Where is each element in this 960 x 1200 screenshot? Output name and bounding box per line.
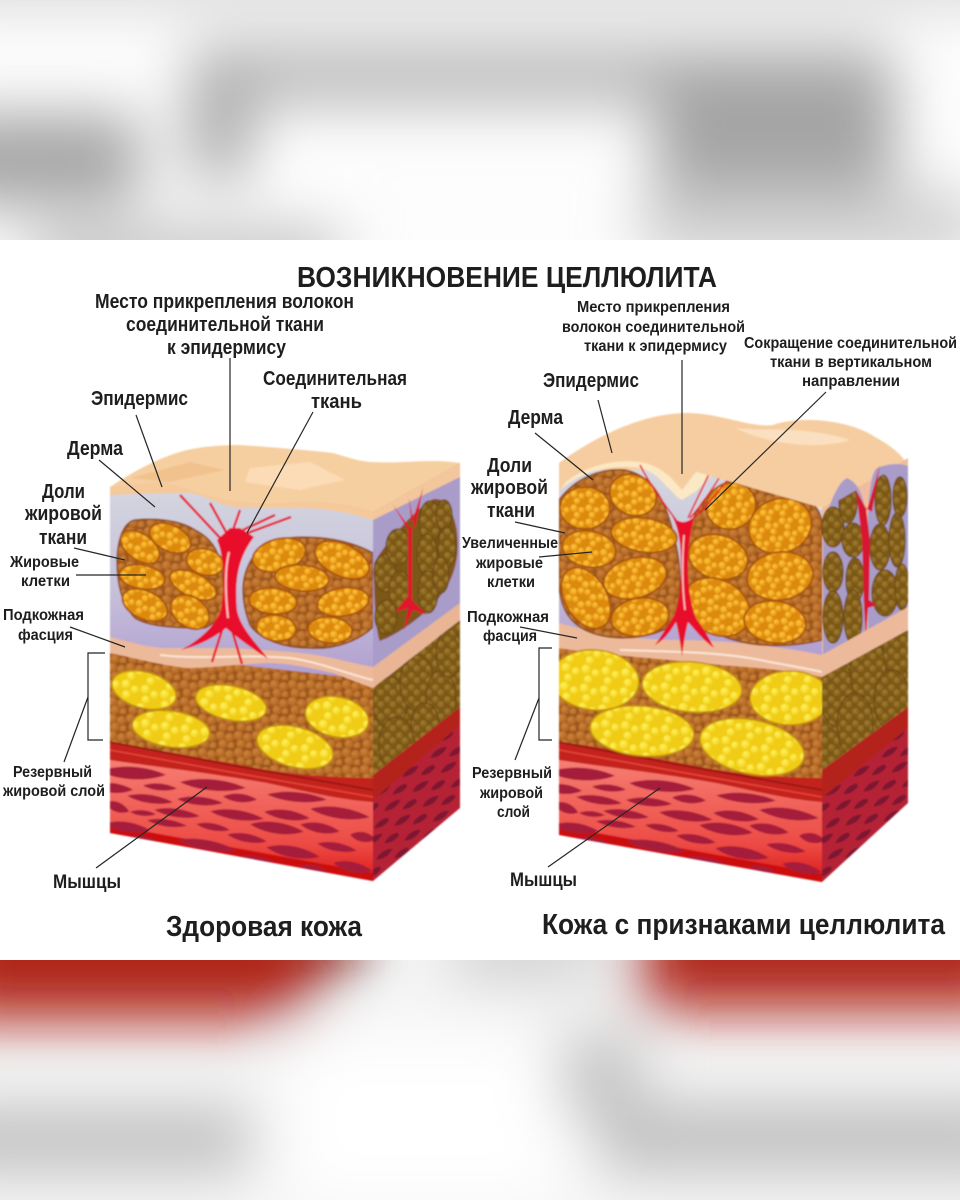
label: fascia, left xyxy=(3,607,84,644)
label: fat lobules, left: жировой xyxy=(24,503,102,525)
blurred bottom background band xyxy=(0,960,960,1200)
right block: enlarged fat cells xyxy=(551,467,819,648)
blurred top background band xyxy=(0,0,960,240)
label: dermis, left: Дерма xyxy=(67,438,124,460)
left block: fat cells xyxy=(115,517,375,645)
central white panel xyxy=(0,240,960,960)
label: reserve fat, left xyxy=(2,764,105,800)
label: reserve fat, right xyxy=(472,765,552,821)
right skin block: skin with cellulite xyxy=(542,413,911,890)
label: epidermis, left: Эпидермис xyxy=(91,388,188,410)
label: muscles, left: Мышцы xyxy=(53,872,121,893)
left block: front face layers xyxy=(108,492,374,882)
label: fat lobules, right: Доли xyxy=(487,455,532,477)
label: attachment point, right: Место прикрепления xyxy=(577,299,730,316)
label: reserve fat, left: Резервный xyxy=(13,764,92,781)
label: fat lobules, right xyxy=(470,455,548,522)
label: enlarged fat cells: Увеличенные xyxy=(462,535,558,552)
title: ВОЗНИКНОВЕНИЕ ЦЕЛЛЮЛИТА xyxy=(297,262,717,294)
label: reserve fat, left: жировой слой xyxy=(2,783,105,800)
right block: domed skin surface xyxy=(559,413,908,530)
right block: dermis and epidermis groove xyxy=(558,469,696,490)
left block: side face xyxy=(373,463,462,881)
label: fat lobules, left: ткани xyxy=(39,527,87,549)
left block: dermis skin strip xyxy=(110,480,373,520)
label: attachment point, right xyxy=(562,299,745,355)
left block: fat lobules xyxy=(117,519,224,628)
label: connective tissue, left: Соединительная xyxy=(263,368,407,390)
label: vertical contraction: ткани в вертикальном xyxy=(770,354,932,371)
label: fat lobules, right: ткани xyxy=(487,500,535,522)
label: fat cells, left: Жировые xyxy=(9,554,79,571)
label: fat lobules, left: Доли xyxy=(42,481,85,503)
left block: subcutaneous fascia xyxy=(110,637,373,688)
label: fat lobules, right: жировой xyxy=(470,477,548,499)
label: fascia, right: фасция xyxy=(483,628,537,645)
label: fat lobules, left xyxy=(24,481,102,549)
right block: fat lobules xyxy=(559,470,680,638)
right block: storage fat cells xyxy=(558,648,824,778)
leader lines: left block xyxy=(64,358,313,868)
label: reserve fat, right: жировой xyxy=(479,785,543,802)
label: reserve fat, right: слой xyxy=(497,804,530,821)
label: vertical contraction: направлении xyxy=(802,373,900,390)
right block: connective tissue xyxy=(640,465,735,656)
label: enlarged fat cells xyxy=(462,535,558,591)
label: attachment point, right: волокон соединительной xyxy=(562,319,745,336)
leader lines: right block xyxy=(515,360,826,867)
label: dermis, right: Дерма xyxy=(508,407,564,429)
label: fascia, left: фасция xyxy=(18,627,73,644)
label: reserve fat, right: Резервный xyxy=(472,765,552,782)
label: attachment point, left: Место прикрепления волокон xyxy=(95,291,354,313)
label: fascia, left: Подкожная xyxy=(3,607,84,624)
label: muscles, right: Мышцы xyxy=(510,870,577,891)
label: fascia, right xyxy=(467,609,549,645)
caption: healthy skin: Здоровая кожа xyxy=(166,911,363,943)
label: epidermis, right: Эпидермис xyxy=(543,370,639,392)
right block: subcutaneous fascia xyxy=(559,623,822,677)
right block: side face xyxy=(820,458,911,882)
label: attachment point, right: ткани к эпидермису xyxy=(584,338,727,355)
left block: top skin surface xyxy=(110,445,460,520)
left skin block: healthy skin xyxy=(93,445,462,890)
label: enlarged fat cells: клетки xyxy=(487,574,535,591)
right block: front face layers xyxy=(558,460,824,883)
left block: connective tissue xyxy=(180,495,291,664)
label: fat cells, left xyxy=(9,554,79,590)
label: attachment point, left: к эпидермису xyxy=(167,337,287,359)
label: vertical contraction xyxy=(744,335,957,390)
label: attachment point, left: соединительной ткани xyxy=(126,314,324,336)
label: attachment point, left xyxy=(95,291,354,359)
label: connective tissue, left xyxy=(263,368,407,413)
label: enlarged fat cells: жировые xyxy=(475,555,543,572)
label: fascia, right: Подкожная xyxy=(467,609,549,626)
left block: storage fat cells xyxy=(110,669,370,770)
label: fat cells, left: клетки xyxy=(21,573,70,590)
label: connective tissue, left: ткань xyxy=(311,391,362,413)
